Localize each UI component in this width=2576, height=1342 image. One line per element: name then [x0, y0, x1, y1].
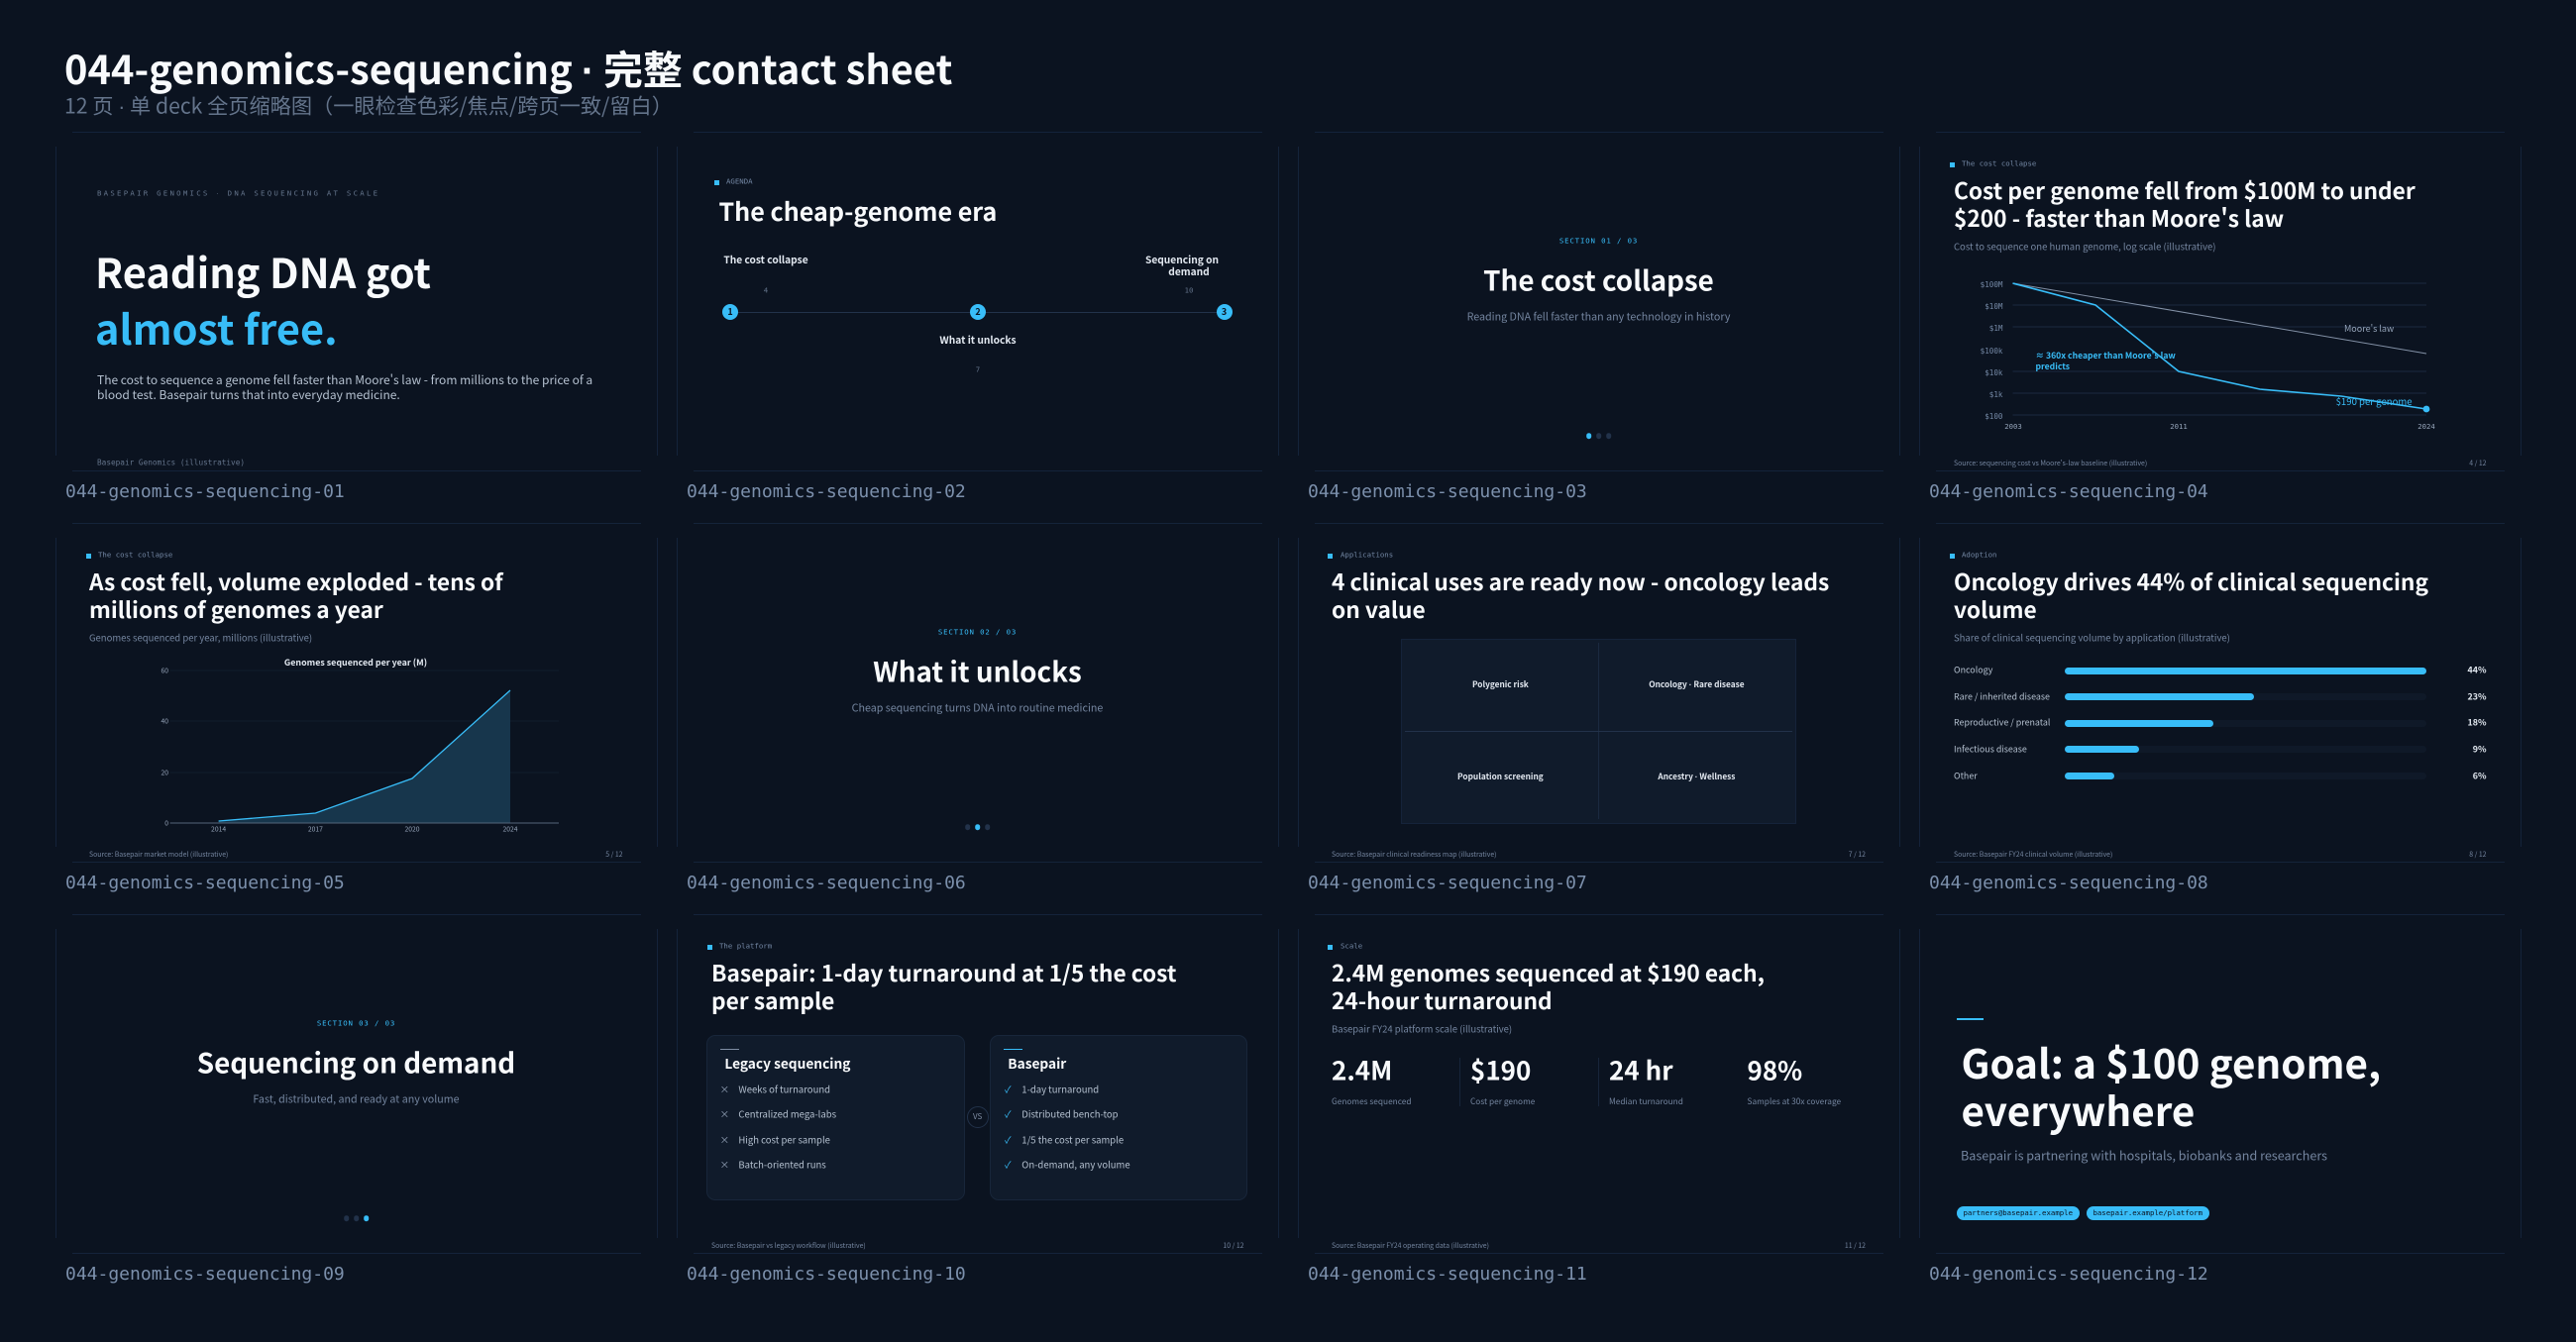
- line chart: cost vs Moore's law: $1k: [1989, 390, 2003, 399]
- item: ×: [720, 1158, 729, 1172]
- progress dots: [344, 1215, 369, 1222]
- line chart: cost vs Moore's law: [1981, 280, 2435, 431]
- panel: slide 12 closing: [1919, 914, 2522, 1254]
- section title: Sequencing on demand: [197, 1042, 515, 1082]
- heading: Cost per genome fell from $100M to under: [1954, 173, 2415, 206]
- stop label: cost collapse: The cost collapse: [723, 252, 808, 266]
- line chart: cost vs Moore's law: $100M: [1981, 280, 2003, 289]
- section subtitle: Fast, distributed, and ready at any volume: [253, 1092, 460, 1107]
- heading: [1332, 565, 1829, 625]
- hero heading: almost free.: [95, 297, 338, 357]
- quadrant: ancestry: Ancestry · Wellness: [1658, 771, 1735, 782]
- quadrant: oncology: Oncology · Rare disease: [1649, 678, 1745, 690]
- quadrant: polygenic: Polygenic risk: [1472, 678, 1529, 690]
- panel: slide 11 stats: [1298, 914, 1900, 1254]
- stop 3: 3: [1222, 305, 1227, 318]
- item: ×: [720, 1106, 729, 1120]
- progress dots: [1586, 433, 1611, 440]
- heading: on value: [1332, 592, 1426, 625]
- card: basepair: On-demand, any volume: [1021, 1158, 1130, 1172]
- heading: Oncology drives 44% of clinical sequencing: [1954, 565, 2428, 597]
- pill: email: partners@basepair.example: [1963, 1208, 2073, 1217]
- page number: 11 / 12: [1845, 1240, 1866, 1250]
- progress dots: [965, 824, 991, 830]
- section title: The cost collapse: [1483, 259, 1714, 299]
- section number: SECTION 01 / 03: [1559, 237, 1638, 246]
- stop label: on demand: [1145, 252, 1219, 278]
- stat: genomes: [1332, 1051, 1412, 1107]
- closing heading: Goal: a $100 genome,: [1962, 1032, 2381, 1090]
- panel: slide 07 quadrant: [1298, 523, 1900, 863]
- slide label 09: 044-genomics-sequencing-09: [65, 1264, 345, 1285]
- panel: slide 06 section: [677, 523, 1279, 863]
- heading: [1954, 565, 2428, 625]
- stop 2: 2: [975, 305, 981, 318]
- hero body: [97, 371, 592, 403]
- eyebrow marker: [1950, 554, 1954, 559]
- area chart: genomes per year: 20: [161, 767, 168, 776]
- heading: As cost fell, volume exploded - tens of: [89, 565, 503, 597]
- eyebrow: BASEPAIR GENOMICS · DNA SEQUENCING AT SCALE: [97, 189, 379, 198]
- eyebrow: The cost collapse: [1962, 159, 2036, 168]
- bar chart: [1954, 664, 2487, 781]
- stop count 7: 7: [976, 365, 980, 374]
- section number: SECTION 03 / 03: [317, 1019, 395, 1028]
- row: oncology: Oncology: [1954, 664, 1992, 676]
- source: Source: Basepair FY24 clinical volume (illustrative): [1954, 849, 2112, 859]
- stat: turnaround: 24 hr: [1609, 1051, 1673, 1087]
- subheading: Basepair FY24 platform scale (illustrative): [1332, 1021, 1512, 1035]
- page number: 4 / 12: [2469, 458, 2487, 467]
- page number: 7 / 12: [1849, 849, 1866, 859]
- area chart: genomes per year: 2024: [502, 824, 518, 834]
- card: basepair: Distributed bench-top: [1021, 1106, 1119, 1120]
- card: basepair: 1/5 the cost per sample: [1021, 1132, 1124, 1146]
- area chart: genomes per year: 40: [161, 715, 168, 725]
- area chart: genomes per year: [161, 656, 559, 834]
- stop label: on demand: demand: [1168, 263, 1210, 278]
- eyebrow marker: [1950, 162, 1954, 166]
- line chart: cost vs Moore's law: 2024: [2417, 422, 2435, 431]
- card title: Legacy sequencing: [724, 1052, 850, 1072]
- row: rare: Rare / inherited disease: [1954, 689, 2050, 702]
- card: legacy: Centralized mega-labs: [738, 1106, 836, 1120]
- vs badge: [967, 1106, 989, 1128]
- heading: millions of genomes a year: [89, 592, 383, 625]
- card title: Basepair: [1008, 1052, 1066, 1072]
- section number: SECTION 02 / 03: [938, 628, 1017, 637]
- source: Source: sequencing cost vs Moore's-law baseline (illustrative): [1954, 458, 2147, 467]
- eyebrow: The platform: [719, 942, 772, 951]
- stat: genomes: Genomes sequenced: [1332, 1095, 1412, 1107]
- line chart: cost vs Moore's law: $1M: [1989, 324, 2003, 333]
- eyebrow: The cost collapse: [98, 551, 172, 560]
- stat: coverage: Samples at 30x coverage: [1748, 1095, 1841, 1107]
- slide label 02: 044-genomics-sequencing-02: [687, 481, 966, 502]
- line chart: cost vs Moore's law: predicts: [2035, 361, 2070, 372]
- source: Source: Basepair market model (illustrative): [89, 849, 228, 859]
- heading: [1954, 173, 2415, 234]
- card: legacy: Weeks of turnaround: [738, 1082, 830, 1095]
- eyebrow: Applications: [1341, 551, 1393, 560]
- line chart: cost vs Moore's law: 2011: [2170, 422, 2188, 431]
- hero body: blood test. Basepair turns that into everyday medicine.: [97, 386, 400, 403]
- area chart: genomes per year: 2014: [211, 824, 226, 834]
- accent bar: [1957, 1018, 1984, 1020]
- heading: per sample: [711, 983, 834, 1016]
- stat: turnaround: Median turnaround: [1609, 1095, 1683, 1107]
- bar chart: 9%: [2473, 743, 2487, 756]
- slide label 06: 044-genomics-sequencing-06: [687, 873, 966, 893]
- panel: slide 04 cost chart: [1919, 132, 2522, 471]
- eyebrow marker: [1328, 945, 1332, 949]
- eyebrow marker: [707, 945, 711, 949]
- slide label 03: 044-genomics-sequencing-03: [1308, 481, 1587, 502]
- area chart: genomes per year: 2020: [404, 824, 420, 834]
- page number: 5 / 12: [605, 849, 622, 859]
- card: basepair: 1-day turnaround: [1021, 1082, 1099, 1095]
- eyebrow: Scale: [1341, 942, 1362, 951]
- quadrant: population: Population screening: [1457, 771, 1544, 782]
- bar chart: 23%: [2467, 689, 2487, 702]
- stop 3: [1217, 304, 1233, 320]
- eyebrow marker: [1328, 554, 1332, 559]
- heading: 24-hour turnaround: [1332, 983, 1553, 1016]
- section subtitle: Reading DNA fell faster than any technology in history: [1467, 310, 1730, 325]
- divider: [1459, 1058, 1460, 1106]
- subtitle: 12 页 · 单 deck 全页缩略图（一眼检查色彩/焦点/跨页一致/留白）: [64, 89, 673, 120]
- eyebrow marker: [714, 180, 719, 184]
- stop 1: [722, 304, 738, 320]
- slide label 10: 044-genomics-sequencing-10: [687, 1264, 966, 1285]
- slide label 05: 044-genomics-sequencing-05: [65, 873, 345, 893]
- heading: 2.4M genomes sequenced at $190 each,: [1332, 956, 1765, 988]
- pill: url: [2087, 1206, 2209, 1220]
- bar chart: 6%: [2473, 769, 2487, 781]
- stop count 4: 4: [764, 286, 768, 295]
- panel: slide 10 comparison: [677, 914, 1279, 1254]
- hero heading: [95, 241, 431, 357]
- eyebrow: Adoption: [1962, 551, 1996, 560]
- page number: 8 / 12: [2469, 849, 2487, 859]
- stat: genomes: 2.4M: [1332, 1051, 1392, 1087]
- item: ×: [720, 1082, 729, 1095]
- panel: slide 08 bars: [1919, 523, 2522, 863]
- slide label 07: 044-genomics-sequencing-07: [1308, 873, 1587, 893]
- source: Source: Basepair FY24 operating data (illustrative): [1332, 1240, 1489, 1250]
- line chart: cost vs Moore's law: $100: [1985, 412, 2003, 421]
- eyebrow marker: [86, 554, 91, 559]
- stop label: unlocks: What it unlocks: [939, 332, 1017, 347]
- panel: slide 09 section: [55, 914, 658, 1254]
- item: ✓: [1005, 1132, 1012, 1146]
- heading: [711, 956, 1176, 1016]
- slide label 08: 044-genomics-sequencing-08: [1929, 873, 2208, 893]
- heading: 4 clinical uses are ready now - oncology leads: [1332, 565, 1829, 597]
- pill: url: basepair.example/platform: [2093, 1208, 2202, 1217]
- subheading: Share of clinical sequencing volume by application (illustrative): [1954, 630, 2230, 644]
- line chart: cost vs Moore's law: $10M: [1985, 302, 2003, 311]
- stat: turnaround: [1609, 1051, 1683, 1107]
- stop count 10: 10: [1185, 286, 1193, 295]
- panel: slide 05 volume chart: [55, 523, 658, 863]
- card: basepair: [990, 1035, 1247, 1200]
- line chart: cost vs Moore's law: ≈ 360x cheaper than Moore's law: [2035, 350, 2176, 361]
- accent: [1004, 1048, 1022, 1050]
- panel: slide 02 agenda: [677, 132, 1279, 471]
- vs badge: VS: [973, 1111, 982, 1122]
- row: reproductive: Reproductive / prenatal: [1954, 716, 2050, 729]
- stop 1: 1: [727, 305, 733, 318]
- closing heading: everywhere: [1962, 1080, 2195, 1138]
- line chart: cost vs Moore's law: $10k: [1985, 368, 2003, 377]
- footer note: Basepair Genomics (illustrative): [97, 458, 245, 466]
- card: legacy: Batch-oriented runs: [738, 1158, 826, 1172]
- line chart: cost vs Moore's law: $100k: [1981, 347, 2003, 356]
- pill: email: [1957, 1206, 2079, 1220]
- closing heading: [1962, 1032, 2381, 1138]
- accent: [720, 1048, 739, 1050]
- item: ✓: [1005, 1158, 1012, 1172]
- slide label 12: 044-genomics-sequencing-12: [1929, 1264, 2208, 1285]
- item: ✓: [1005, 1082, 1012, 1095]
- heading: $200 - faster than Moore's law: [1954, 201, 2284, 234]
- heading: [89, 565, 503, 625]
- stat: cost: $190: [1470, 1051, 1531, 1087]
- closing subheading: Basepair is partnering with hospitals, biobanks and researchers: [1961, 1145, 2327, 1164]
- area chart: genomes per year: 2017: [308, 824, 323, 834]
- page number: 10 / 12: [1223, 1240, 1244, 1250]
- area chart: genomes per year: 60: [161, 666, 168, 675]
- section title: What it unlocks: [873, 651, 1082, 690]
- line chart: cost vs Moore's law: $190 per genome: [2336, 394, 2413, 408]
- bar chart: 44%: [2467, 664, 2487, 676]
- panel: slide 01 hero: [55, 132, 658, 471]
- hero body: The cost to sequence a genome fell faster than Moore's law - from millions to the price of a: [97, 371, 592, 388]
- stop 2: [970, 304, 986, 320]
- stat: coverage: [1748, 1051, 1841, 1107]
- area chart: genomes per year: 0: [164, 818, 168, 828]
- area chart: genomes per year: Genomes sequenced per year (M): [284, 656, 427, 669]
- subheading: Genomes sequenced per year, millions (illustrative): [89, 630, 312, 644]
- source: Source: Basepair clinical readiness map (illustrative): [1332, 849, 1496, 859]
- quadrant matrix: [1401, 639, 1796, 824]
- source: Source: Basepair vs legacy workflow (illustrative): [711, 1240, 866, 1250]
- line chart: cost vs Moore's law: 2003: [2004, 422, 2022, 431]
- heading: The cheap-genome era: [719, 193, 997, 229]
- row: infectious: Infectious disease: [1954, 743, 2027, 756]
- row: other: Other: [1954, 769, 1978, 781]
- line chart: cost vs Moore's law: Moore's law: [2344, 322, 2394, 335]
- divider: [1598, 1058, 1599, 1106]
- eyebrow: AGENDA: [726, 177, 753, 186]
- stop label: on demand: Sequencing on: [1145, 252, 1219, 266]
- slide label 04: 044-genomics-sequencing-04: [1929, 481, 2208, 502]
- section subtitle: Cheap sequencing turns DNA into routine medicine: [852, 701, 1103, 716]
- card: legacy: [706, 1035, 965, 1200]
- card: legacy: High cost per sample: [738, 1132, 830, 1146]
- timeline: [722, 304, 1233, 320]
- title: 044-genomics-sequencing · 完整 contact sheet: [64, 40, 952, 96]
- stat: coverage: 98%: [1748, 1051, 1802, 1087]
- bar chart: 18%: [2467, 716, 2487, 729]
- slide label 11: 044-genomics-sequencing-11: [1308, 1264, 1587, 1285]
- item: ✓: [1005, 1106, 1012, 1120]
- heading: [1332, 956, 1765, 1016]
- heading: volume: [1954, 592, 2037, 625]
- hero heading: Reading DNA got: [95, 241, 431, 300]
- stat: cost: [1470, 1051, 1535, 1107]
- slide label 01: 044-genomics-sequencing-01: [65, 481, 345, 502]
- subheading: Cost to sequence one human genome, log scale (illustrative): [1954, 239, 2216, 253]
- heading: Basepair: 1-day turnaround at 1/5 the cost: [711, 956, 1176, 988]
- panel: slide 03 section: [1298, 132, 1900, 471]
- stat: cost: Cost per genome: [1470, 1095, 1535, 1107]
- item: ×: [720, 1132, 729, 1146]
